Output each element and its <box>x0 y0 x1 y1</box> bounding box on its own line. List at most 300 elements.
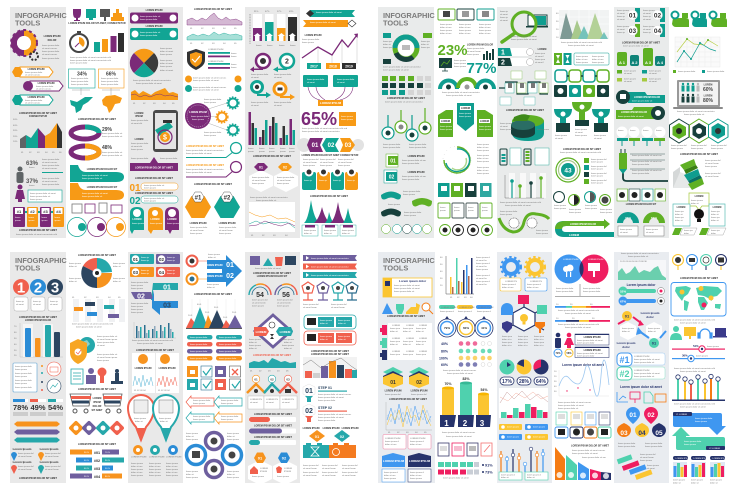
hex card: orange: 02 <box>283 166 287 170</box>
venn diagram: LOREM IPSUM <box>563 259 578 261</box>
text block: wave chart: lorem ipsum dolor sit amet consec <box>558 401 592 404</box>
numbered cards: ipsum <box>54 220 61 222</box>
text block: gears: sit amet consec <box>42 47 58 50</box>
text block: phone top: IPSUM <box>135 115 143 118</box>
area chart: mint <box>618 260 666 280</box>
legend: line chart: lorem ipsum dolor <box>678 70 696 73</box>
stat: 54% <box>48 399 63 416</box>
legend squares <box>584 158 607 184</box>
text block: petals: lorem ipsum <box>186 470 198 473</box>
center label: SIT AMET <box>91 409 103 412</box>
diamond icons <box>68 420 125 436</box>
info box: coral <box>304 331 356 345</box>
stat box: 66%: lorem ipsum dolor <box>101 77 119 80</box>
grouped bar chart: lorem <box>259 147 265 150</box>
dot rating grid: 40% <box>441 342 449 346</box>
purple tag: lorem ipsum dolor <box>36 85 54 88</box>
number card 04: sit amet <box>643 28 651 31</box>
line graph: lorem ipsum dolor <box>302 38 320 41</box>
orange banner <box>70 183 124 200</box>
hexagon badges <box>670 119 728 143</box>
triangle chart: 40 <box>556 13 559 15</box>
bar and line chart <box>499 388 548 418</box>
number card 01 <box>617 8 640 22</box>
heading: half rings: LOREM IPSUM DOLOR SIT <box>626 203 657 206</box>
text block: magnifier: sit amet <box>500 19 508 22</box>
number card 03: lorem ip <box>617 31 626 34</box>
cylinder bars: A 2 <box>631 60 638 65</box>
row table: LOREM <box>419 325 427 327</box>
text block: hexagons: lorem ipsum dol <box>711 144 727 147</box>
yellow callout: lorem ipsum dolor sit amet <box>394 284 420 287</box>
text block: stairs: sit amet lorem <box>705 175 719 178</box>
segmented scale 2 <box>555 318 610 329</box>
heading: cylinders: lorem ipsum dolor sit amet <box>623 44 649 48</box>
bubble: right: dolor sit <box>711 213 719 216</box>
plug diagram: lorem ipsum dolor sit amet con <box>632 169 663 172</box>
text block: lorem ipsum dolor <box>70 62 88 64</box>
area chart: teal: 05 <box>234 43 237 45</box>
stat: 54%: 54% <box>48 403 63 412</box>
orange hexagon: #1 <box>195 196 202 202</box>
line chart: 03 <box>273 235 276 237</box>
card column 3 <box>584 412 597 438</box>
pill labels: lorem ipsum dolor <box>219 350 237 353</box>
grouped bar chart: ipsum <box>259 151 265 153</box>
tile 02 <box>156 254 180 264</box>
bubble: left: lorem ips <box>675 216 685 219</box>
number card 01: lorem ip <box>617 15 626 18</box>
orange banner: lorem ipsum dolor sit <box>82 195 103 198</box>
title: INFOGRAPHIC <box>383 256 435 265</box>
icon: man <box>555 333 561 348</box>
number card 03: sit amet <box>617 28 625 31</box>
purple banner: lorem ipsum dolor <box>140 18 158 21</box>
row table: dolor sit <box>403 343 411 346</box>
stopwatches <box>554 192 610 206</box>
text columns: lorem ipsum <box>320 164 332 167</box>
arrow bar: teal <box>14 438 60 442</box>
text columns: dolor sit am <box>149 465 160 468</box>
icon: shield and globe <box>70 337 95 364</box>
hex card: purple: sit amet lorem <box>252 179 266 182</box>
note: bottom: lorem ipsum dolor sit amet <box>577 352 603 355</box>
outlined notes <box>618 226 664 236</box>
step 02: lorem ipsum dolor sit <box>144 197 165 200</box>
text block: tilted labels <box>640 453 659 470</box>
left green label: lorem ipsum <box>440 128 452 131</box>
year labels <box>307 63 356 69</box>
orange hexagon <box>185 192 211 218</box>
text block: phone bottom: lorem ipsum <box>131 148 143 151</box>
notes: mint outline: lorem ipsum d <box>501 474 516 476</box>
chevron badge 01: 01 <box>390 380 396 386</box>
outline arrows row 1: lorem ipsum <box>193 402 205 405</box>
orange pill row: lorem ipsum dolor sit amet consec <box>193 76 227 80</box>
butterfly chart: 90 % <box>84 452 89 454</box>
text block: ribbon: lorem ipsum <box>131 287 143 290</box>
list box: lorem ipsum <box>15 368 27 371</box>
icon: chart screen: lorem ipsum <box>454 62 466 65</box>
yellow callout: lorem ipsum dolor sit <box>394 290 415 293</box>
timeline: orange heading with teal line: lorem ipsum dolor sit amet consectetur <box>186 149 224 152</box>
ring chart: 29%: 29% <box>102 127 113 133</box>
text block: gears <box>42 44 60 60</box>
outline cards: lorem <box>440 206 446 209</box>
donut labels: dolor sit <box>421 43 429 46</box>
heading: puzzle labels <box>303 427 358 430</box>
text blocks: icon cards <box>440 23 491 35</box>
icon: support person <box>670 326 682 340</box>
text block: numbered cards: lorem ip <box>50 300 59 303</box>
button labels: lorem ipsum <box>533 436 545 438</box>
text block: diamond: dolor sit <box>284 341 292 344</box>
step 02: lorem ipsum <box>144 200 156 202</box>
area chart: orange: 02 <box>143 103 146 105</box>
heading: bar and line chart: LOREM IPSUM DOLOR SIT AMET <box>311 353 349 356</box>
card column 1 <box>555 412 568 438</box>
text block: drops: lorem ipsum dolor <box>645 445 663 448</box>
bar chart: rounded columns: 40 <box>14 344 17 346</box>
text block: diamond: dolor sit <box>284 347 292 350</box>
text columns: lorem ipsum <box>166 462 178 465</box>
row table: LOREM <box>392 338 400 340</box>
text block: pie: lorem ipsum <box>500 128 512 131</box>
butterfly chart: #01 <box>94 451 100 455</box>
legend squares: lorem ipsum dol <box>591 172 607 175</box>
pill row: mint: 52% <box>620 290 626 294</box>
blue down arrow: lorem ipsum <box>695 420 707 423</box>
text block: pie: lorem ipsum <box>160 53 172 56</box>
stat: 78% <box>13 399 28 416</box>
note: bottom: lorem ipsum dolor <box>577 354 595 358</box>
callout box: lorem ipsum dolor sit amet <box>30 192 56 195</box>
caption: tile grid: LOREM IPSUM DOLOR SIT AMET <box>387 97 425 100</box>
drop badge 01 <box>626 407 640 424</box>
wave line chart: 20 <box>554 376 557 378</box>
tile 01: lorem ip <box>141 256 150 259</box>
callout box: lorem ipsum dolor sit <box>30 195 51 198</box>
progress bars: lorem <box>231 55 237 58</box>
pin list: Lorem Ipsum <box>40 460 59 464</box>
heading: area chart: LOREM IPSUM DOLOR SIT AMET <box>19 112 57 115</box>
text columns: sit amet lorem <box>303 161 317 164</box>
numbered cards: lorem <box>15 216 21 219</box>
orange bubble tag: lorem ipsum <box>150 222 162 225</box>
text block: hexagons: lorem ipsum <box>671 147 683 150</box>
tag labels: LOREM IPSUM <box>459 307 474 309</box>
text columns: lorem ipsum <box>131 462 143 465</box>
text block: arrows lower: sit amet <box>274 104 282 107</box>
heading: stair chart: lorem ipsum dolor sit am <box>582 456 606 459</box>
purple base band: lorem ipsum dolor <box>131 157 149 160</box>
text block: ribbon: lorem ipsum <box>131 284 143 287</box>
panel: sheet 4 column 4 <box>554 254 611 480</box>
panel: sheet 1 column 1 <box>10 7 67 238</box>
thin column chart <box>440 256 474 299</box>
notes: mint outline: lorem ipsum d <box>527 474 542 476</box>
icon: stopwatch <box>70 31 88 52</box>
text block: 29%: lorem ipsum dolor sit <box>102 135 123 138</box>
text blocks: icon cards: dolor sit am <box>459 26 470 29</box>
text columns: lorem ipsu <box>534 335 545 338</box>
text block: wave chart: lorem ipsum dolor sit amet <box>558 404 584 407</box>
list box: lorem ipsum dolo <box>15 372 32 375</box>
text block: magnifier: lorem ip <box>500 16 509 19</box>
purple circle with gears: lorem ipsum dolor <box>191 115 209 118</box>
note boxes: dolor sit am <box>385 443 396 446</box>
numeral 3 <box>47 279 63 296</box>
ribbon: purple: lorem ipsum dolor sit amet consectetur <box>311 257 349 260</box>
drop badge 05: 05 <box>655 430 663 437</box>
heading: icon row: Lorem ipsum dolor sit amet <box>620 385 663 389</box>
pin tabs: lorem ip <box>347 179 356 182</box>
panel: sheet 1 column 4 <box>185 8 242 235</box>
panel: sheet 1 column 6 <box>297 10 364 236</box>
timeline: orange heading with purple line: lorem ipsum dolor sit amet consectetur <box>186 168 224 171</box>
segmented scale 2: 20 <box>572 318 575 320</box>
text block: magnifier: lorem ip <box>500 10 509 13</box>
text block: tilted labels: sit amet <box>647 467 655 470</box>
numbered cards: lorem <box>28 216 34 219</box>
row table: LOREM <box>392 351 400 353</box>
segmented scale 1: 20 <box>570 304 573 306</box>
outlined text box: dolor sit am <box>592 58 603 61</box>
bar chart with arrows: lorem <box>267 44 273 47</box>
text columns: sit amet lorem <box>322 474 336 477</box>
puzzle bricks <box>303 430 356 458</box>
text block: venn <box>555 284 610 296</box>
teal banner: LOREM IPSUM DOLOR SIT <box>87 168 118 171</box>
text block: radial: dolor sit am <box>477 157 488 160</box>
text block: radial: lorem ipsum <box>477 160 489 163</box>
heading: stairs: LOREM IPSUM DOLOR SIT AMET <box>680 153 718 156</box>
stat: 37%: 37% <box>26 179 39 185</box>
text block: gauges <box>252 298 293 308</box>
text block: 29%: lorem ipsum dolor sit <box>102 132 123 135</box>
bar chart with arrows: 49% <box>289 11 293 13</box>
stat: 63% <box>26 158 63 173</box>
battery icons <box>500 148 549 165</box>
teal hexagon <box>214 192 240 218</box>
percent pills <box>500 377 548 385</box>
number card 02 <box>643 8 665 22</box>
text block: S curve: lorem ipsum <box>536 232 548 235</box>
drop badge 02 <box>644 407 658 424</box>
area chart: teal: 03 <box>212 43 215 45</box>
text block: pins <box>383 143 427 149</box>
big pin: teal: dolor sit <box>160 420 168 423</box>
pin icons <box>382 108 431 141</box>
pie: yellow <box>516 359 532 374</box>
tile 04: 04 <box>159 270 164 275</box>
numeral 1: 1 <box>17 280 25 296</box>
caption: triangle chart <box>561 41 602 47</box>
mountain chart: 30.5 <box>214 307 219 309</box>
card column 4 <box>598 412 611 438</box>
segmented scale 1: 30 <box>590 304 593 306</box>
heading: gears: LOREM IPSUM <box>44 35 60 38</box>
dome column chart: lorem <box>618 129 624 132</box>
outlined notes <box>382 469 431 482</box>
caption: icon row: LOREM IPSUM DOLOR SIT <box>257 275 288 278</box>
purple base band <box>130 157 178 171</box>
mountain chart: 10.9 <box>188 315 193 317</box>
card 01 <box>386 154 426 167</box>
caption: icon row <box>253 267 291 278</box>
text block: 23%: lorem ipsum dolor <box>467 47 485 50</box>
merge diagram: sit amet <box>307 81 315 84</box>
teal banner: lorem ipsum dolor sit amet <box>82 174 108 177</box>
numbered cards <box>13 207 64 227</box>
row table: dolor sit <box>416 343 424 346</box>
title: INFOGRAPHIC <box>15 11 67 20</box>
purple banner <box>130 12 178 24</box>
number card #1: #1 <box>619 355 630 365</box>
info box: coral: lorem ipsum <box>320 335 332 338</box>
stat: 63%: sit amet consec <box>42 167 58 170</box>
text block: radial: lorem ipsum <box>477 166 489 169</box>
outline cards: ipsum <box>482 210 488 212</box>
tile 01 <box>130 254 154 264</box>
text block: pie: dolor sit amet <box>160 69 174 72</box>
card 01: lorem ipsum dolor <box>402 162 420 165</box>
tag labels: LOREM IPSUM <box>441 307 456 309</box>
text block: drops: lorem ipsum dolor <box>645 442 663 445</box>
note: top: lorem ipsum dolor <box>577 342 595 344</box>
pin list: sit amet lorem <box>45 468 59 471</box>
stat: 37%: lorem ipsum dolor <box>42 183 60 186</box>
info box: teal: dolor sit <box>338 322 346 325</box>
stat box: 34%: 34% <box>77 72 88 78</box>
text columns: lorem ipsum <box>338 164 350 167</box>
text block: thin chart: sit amet lor <box>476 259 487 262</box>
hex card: orange <box>274 163 298 192</box>
outlined notes: dolor sit am <box>410 474 421 477</box>
pill labels: lorem ipsum dolor <box>190 357 208 360</box>
text columns <box>303 158 354 167</box>
bubble: left: LOREM <box>677 206 685 209</box>
3D pie chart <box>511 114 544 141</box>
bar chart: rounded columns: 60 <box>14 332 17 334</box>
text block: puzzle: lorem ipsum <box>69 277 81 280</box>
mountain chart: 10.5 <box>223 317 228 319</box>
petal diagram <box>186 432 242 478</box>
tile 04: lorem ip <box>167 269 176 272</box>
text block: pins: lorem ipsum dolor <box>409 143 427 146</box>
note: top <box>575 334 609 345</box>
purple circle with gears: lorem ipsum dolor <box>204 131 222 134</box>
outlined notes: lorem ipsum <box>646 228 658 231</box>
teal banner with diamond: lorem ipsum dolor sit amet <box>316 11 342 14</box>
puzzle bricks: 02 <box>340 434 345 439</box>
row table: LOREM <box>406 338 414 340</box>
row table: lorem ipsu <box>416 327 427 330</box>
outlined tiles <box>555 70 609 82</box>
fluctuation card: blue: 01 02 03 04 <box>134 390 146 392</box>
timeline: orange heading with purple line: lorem ipsum dolor sit amet <box>186 171 212 174</box>
legend squares: lorem ipsum dol <box>591 179 607 182</box>
purple banner: lorem ipsum dolor sit <box>140 15 161 18</box>
heading: bar chart <box>19 316 57 322</box>
row table: lorem ipsu <box>403 353 414 356</box>
row table: LOREM <box>419 338 427 340</box>
slider: pink: 54% <box>693 344 699 348</box>
big pin: teal <box>153 395 179 440</box>
pin list: Lorem Ipsum <box>13 460 32 464</box>
stat box: 34%: lorem ipsum dolor <box>71 77 89 80</box>
note: yellow: dolor sit am <box>502 286 513 289</box>
bubble: right: lorem ips <box>711 210 721 213</box>
hex card: orange: lorem ipsum dolor <box>277 176 295 179</box>
mini bars 3: lorem ipsum <box>710 478 722 482</box>
legend squares: lorem ipsum <box>591 182 603 184</box>
map: teal region <box>70 97 93 113</box>
hex card: blue: 02 <box>282 456 287 460</box>
pin tabs <box>302 168 358 190</box>
heading: bar chart: LOREM IPSUM DOLOR SIT AMET <box>19 316 57 319</box>
trophies <box>554 102 610 132</box>
mini bars 1: dolor sit <box>673 482 681 484</box>
tile 04 <box>156 267 180 277</box>
text block: petals: lorem ipsum <box>186 476 198 479</box>
heading: puzzle labels: LOREM IPSUM <box>342 427 358 430</box>
text block: stopwatches: lorem ipsum <box>585 204 597 207</box>
pin list <box>11 447 61 474</box>
heading: bar and line chart <box>311 350 349 356</box>
pin tabs: lorem ip <box>333 179 342 182</box>
text columns: lorem ipsum dol <box>338 158 354 161</box>
cylinder column 1 <box>440 382 456 428</box>
line chart <box>249 202 295 237</box>
panel: sheet 2 column 3 <box>497 7 552 238</box>
stat: 65%: lorem ipsum <box>341 115 353 118</box>
tag labels: LOREM IPSUM <box>478 307 493 309</box>
caption: thin bar chart: lorem ipsum dolor sit amet consectetur elit <box>132 339 173 342</box>
heading: wave chart: Lorem ipsum dolor sit amet <box>562 363 605 367</box>
fluctuation card: blue <box>132 353 155 393</box>
list box: lorem ipsum <box>15 382 27 385</box>
heading: donut: LOREM IPSUM DOLOR SIT AMET <box>563 148 601 151</box>
stat: 63%: sit amet consec <box>42 161 58 164</box>
center label: IPSUM <box>93 401 101 404</box>
title: TOOLS <box>15 18 40 28</box>
text block: phone top <box>131 112 149 125</box>
text block: gauges: lorem ipsum dol <box>252 298 268 302</box>
text block: pins: lorem ipsum dolor <box>383 146 401 149</box>
heading: cylinders: LOREM IPSUM DOLOR SIT AMET <box>622 42 660 44</box>
note: blue: dolor sit am <box>527 286 538 289</box>
outlined notes: dolor sit am <box>384 474 395 477</box>
text block: venn: lorem ipsum dolor <box>556 290 574 293</box>
panel: sheet 2 column 5 <box>614 7 669 238</box>
text blocks: icon cards: dolor sit am <box>479 26 490 29</box>
purple bubble tag: LOREM <box>167 218 177 221</box>
area chart: teal: 02 <box>259 370 262 372</box>
thin column chart: 50 <box>440 264 443 266</box>
heading: teal banner: LOREM IPSUM <box>146 25 162 28</box>
text block: arrow: lorem ipsum <box>207 283 219 286</box>
slider: pink <box>672 344 725 352</box>
panel: sheet 1 column 2 <box>68 9 126 236</box>
notes: mint outline: dolor sit <box>527 476 535 479</box>
button labels: lorem ipsum <box>507 426 519 428</box>
donut labels: lorem ipsum dolor sit amet <box>383 68 409 72</box>
hex card: orange: IPSUM <box>260 471 267 473</box>
numbered cards: ipsum <box>28 220 35 222</box>
bullet dots <box>41 365 43 391</box>
info box: teal: dolor sit <box>320 322 328 325</box>
